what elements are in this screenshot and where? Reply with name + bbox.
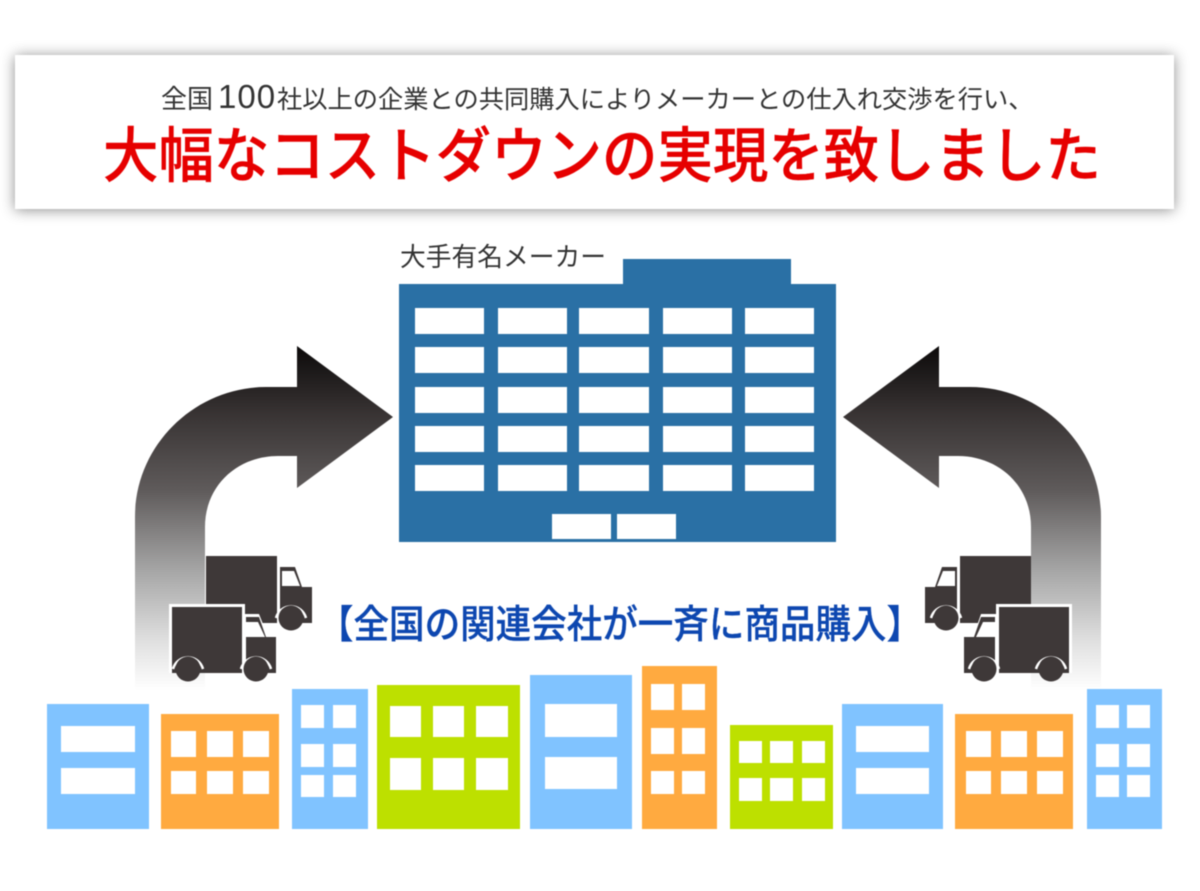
icon: building 10 xyxy=(1087,689,1162,829)
icon: building 1 xyxy=(47,704,149,829)
icon: building 5 xyxy=(530,675,632,829)
icon: manufacturer building xyxy=(399,259,836,542)
icon: truck right front xyxy=(962,604,1072,682)
panel: affiliated company buildings xyxy=(47,666,1162,829)
icon: building 6 xyxy=(642,666,717,829)
arrow: right curved arrow xyxy=(843,346,1101,690)
text: bulk purchase caption: 【全国の関連会社が一斉に商品購入】 xyxy=(318,604,922,647)
icon: building 2 xyxy=(161,714,279,829)
text: subheading: 社以上の企業との共同購入によりメーカーとの仕入れ交渉を行い、 xyxy=(277,86,1034,114)
icon: building 8 xyxy=(842,704,943,829)
icon: building 7 xyxy=(730,725,833,829)
text: headline: 大幅なコストダウンの実現を致しました xyxy=(103,123,1101,190)
icon: building 3 xyxy=(292,689,368,829)
icon: truck left front xyxy=(169,604,278,682)
icon: truck right rear xyxy=(925,556,1031,630)
arrow: left curved arrow xyxy=(135,346,393,690)
icon: building 9 xyxy=(955,714,1073,829)
icon: building 4 xyxy=(377,685,520,829)
text: subheading: 全国 xyxy=(161,84,213,114)
text: subheading: 100 xyxy=(218,78,276,115)
icon: truck left rear xyxy=(206,556,312,630)
panel: headline banner xyxy=(15,55,1174,209)
label: major manufacturer: 大手有名メーカー xyxy=(400,242,606,272)
